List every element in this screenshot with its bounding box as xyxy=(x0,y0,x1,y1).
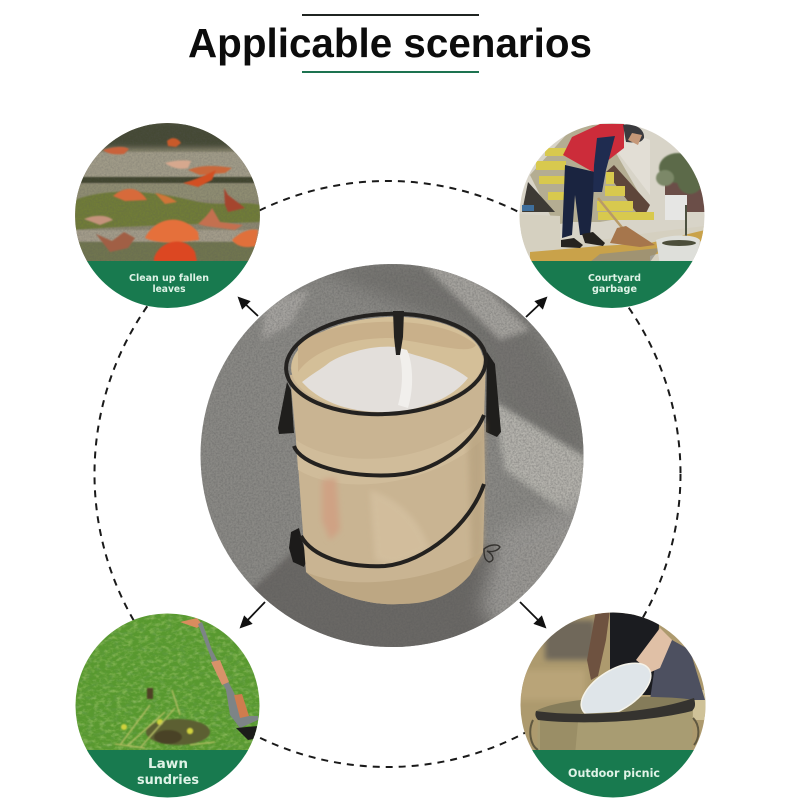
carpet background xyxy=(195,258,590,655)
bin rim xyxy=(535,698,695,722)
bag middle ring xyxy=(294,415,484,475)
lawn trimmer tool xyxy=(180,618,202,628)
staircase xyxy=(530,125,640,225)
white liner bag xyxy=(302,347,468,412)
picnic photo xyxy=(515,608,710,755)
bag interior xyxy=(291,316,483,408)
bag side clip xyxy=(289,528,307,567)
icon: pop-up garbage bag xyxy=(278,309,501,604)
orange leaves xyxy=(84,138,258,262)
arrow: center to top right xyxy=(526,298,546,317)
bag lower ring xyxy=(301,484,484,566)
potted plant xyxy=(685,205,687,236)
panel: outdoor picnic xyxy=(515,608,710,800)
floor xyxy=(515,214,705,265)
title bottom rule xyxy=(302,71,479,73)
caption: Clean up fallen xyxy=(129,273,209,284)
green caption band xyxy=(87,261,248,308)
person sweeping xyxy=(563,124,624,172)
arrow: center to top left xyxy=(239,298,258,316)
green caption band xyxy=(532,261,692,308)
courtyard photo xyxy=(515,120,710,265)
caption line 2: leaves xyxy=(152,284,186,295)
caption line 2: sundries xyxy=(137,772,199,788)
bag loop xyxy=(484,545,500,562)
arrow: center to bottom left xyxy=(241,602,265,627)
bag top rim xyxy=(284,309,488,419)
caption line 2: garbage xyxy=(592,284,637,295)
green caption band xyxy=(87,750,248,798)
lawn photo xyxy=(70,610,265,755)
panel: courtyard garbage xyxy=(515,120,710,311)
bin inner back xyxy=(536,697,694,716)
dashed connecting ring xyxy=(94,181,680,767)
bag body xyxy=(290,355,486,604)
arrow: center to bottom right xyxy=(520,602,545,627)
caption: Outdoor picnic xyxy=(568,766,660,780)
person legs and dress xyxy=(587,610,610,680)
bag left strap xyxy=(278,382,294,434)
broom xyxy=(598,198,624,230)
bag top strap xyxy=(393,311,404,355)
leaves photo xyxy=(70,120,265,265)
grass debris pile xyxy=(115,688,215,748)
title: Applicable scenarios xyxy=(188,20,592,66)
bag rear strap xyxy=(486,352,501,437)
panel: clean up fallen leaves xyxy=(70,120,265,311)
picnic bin xyxy=(537,708,693,755)
caption: Courtyard xyxy=(588,273,641,284)
green caption band xyxy=(515,750,710,800)
panel: center product photo xyxy=(195,258,590,655)
title top rule xyxy=(302,14,479,16)
wall xyxy=(618,138,650,194)
panel: lawn sundries xyxy=(70,610,265,800)
caption: Lawn xyxy=(148,756,188,772)
white plate xyxy=(572,652,660,728)
